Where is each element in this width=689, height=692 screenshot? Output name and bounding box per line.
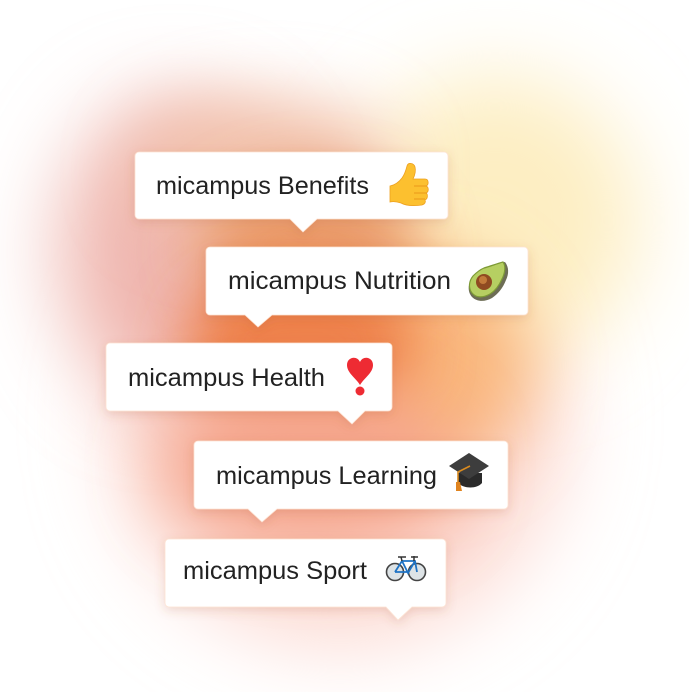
card: micampus Nutrition	[206, 247, 528, 327]
card: micampus Benefits	[135, 152, 448, 232]
icon: avocado	[469, 262, 508, 301]
card: micampus Sport	[165, 539, 446, 620]
label: micampus Learning: micampus Learning	[216, 462, 437, 490]
label: micampus Sport: micampus Sport	[183, 557, 367, 585]
icon: heart exclamation	[347, 358, 373, 396]
background: blurred gradient blob	[60, 75, 640, 645]
label: micampus Nutrition: micampus Nutrition	[228, 267, 451, 295]
icon: graduation cap	[449, 453, 489, 491]
label: micampus Benefits: micampus Benefits	[156, 172, 369, 200]
icon: bicycle	[386, 556, 426, 580]
label: micampus Health: micampus Health	[128, 364, 325, 392]
card: micampus Learning	[194, 441, 508, 522]
card: micampus Health	[106, 343, 392, 424]
icon: thumbs up	[390, 163, 428, 206]
